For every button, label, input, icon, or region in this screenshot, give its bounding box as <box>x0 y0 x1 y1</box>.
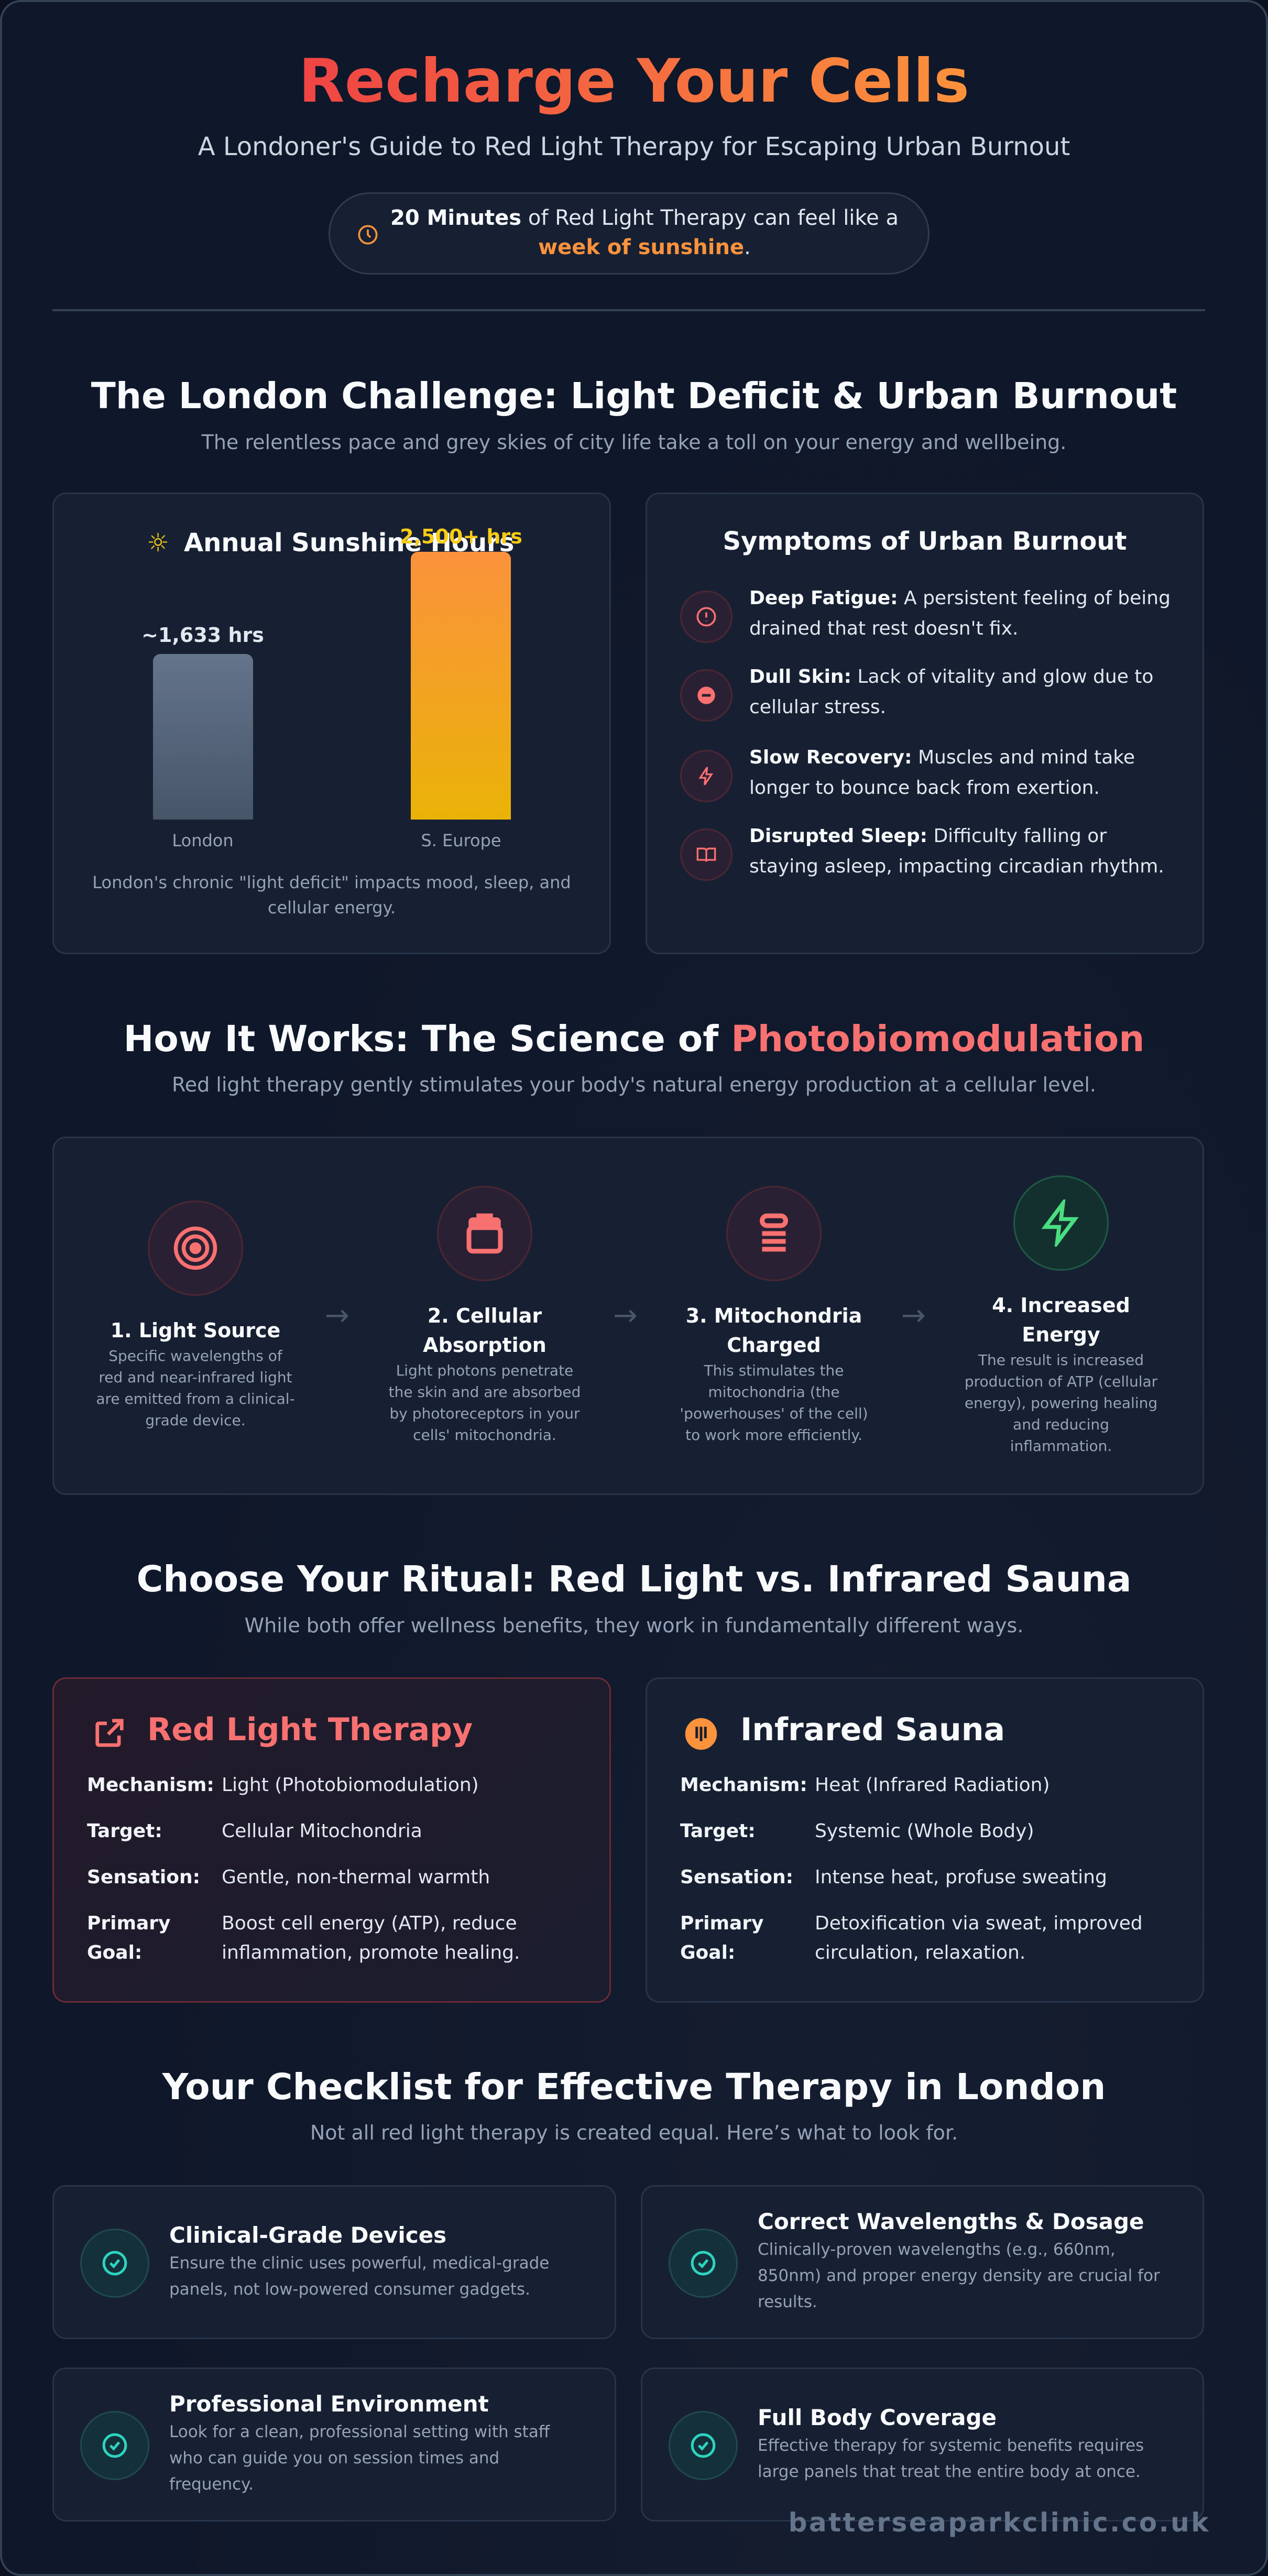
subtitle: A Londoner's Guide to Red Light Therapy for Escaping Urban Burnout <box>198 132 1070 161</box>
step 2: by photoreceptors in your <box>389 1405 580 1422</box>
comparison rows: Goal: <box>680 1942 735 1963</box>
subheading: Red light therapy gently stimulates your body's natural energy production at a cellular level. <box>172 1073 1096 1096</box>
step 4: and reducing <box>1013 1416 1109 1433</box>
step 2: the skin and are absorbed <box>389 1383 581 1401</box>
icon: stack <box>726 1186 822 1281</box>
step 4 <box>965 1175 1158 1455</box>
symptom list: Disrupted Sleep: Difficulty falling or staying asleep, impacting circadian rhythm. <box>749 825 1164 877</box>
comparison rows: Goal: <box>87 1942 142 1963</box>
bar chart <box>141 525 522 850</box>
callout text: week of sunshine. <box>538 235 751 259</box>
step 3 <box>680 1186 868 1444</box>
comparison rows: Cellular Mitochondria <box>222 1820 422 1842</box>
subheading: The relentless pace and grey skies of city life take a toll on your energy and wellbeing. <box>202 431 1066 454</box>
step 3: mitochondria (the <box>708 1383 840 1401</box>
card title: Red Light Therapy <box>147 1711 473 1748</box>
chart heading: ☼ Annual Sunshine Hours <box>147 528 514 558</box>
icon: alert <box>680 591 733 643</box>
step 4: production of ATP (cellular <box>965 1373 1157 1390</box>
comparison rows: Primary <box>87 1913 171 1934</box>
comparison rows: inflammation, promote healing. <box>222 1942 520 1963</box>
step 2: Absorption <box>423 1334 546 1357</box>
bar chart: S. Europe <box>421 831 501 850</box>
arrow: → <box>613 1298 638 1333</box>
comparison rows: Boost cell energy (ATP), reduce <box>222 1913 517 1934</box>
icon: check <box>80 2411 149 2480</box>
bar: S. Europe <box>411 552 511 820</box>
callout pill <box>329 192 930 275</box>
step 3: This stimulates the <box>704 1362 844 1379</box>
step 3: to work more efficiently. <box>685 1426 862 1444</box>
title: Recharge Your Cells <box>299 46 969 116</box>
comparison rows: Mechanism: <box>87 1774 214 1796</box>
checklist card 4 <box>641 2367 1204 2522</box>
panel: infrared sauna card <box>646 1677 1204 2003</box>
bar chart: London <box>172 831 234 850</box>
step 2: Light photons penetrate <box>396 1362 573 1379</box>
icon: check <box>669 2229 738 2298</box>
bar chart: ~1,633 hrs <box>141 624 264 647</box>
step 1: Specific wavelengths of <box>108 1347 282 1365</box>
checklist card 1 <box>52 2185 616 2339</box>
checklist card 2: Clinically-proven wavelengths (e.g., 660nm, 850nm) and proper energy density are crucial for results. <box>758 2240 1160 2311</box>
heading: Choose your ritual: Choose Your Ritual: Red Light vs. Infrared Sauna <box>137 1558 1131 1600</box>
arrow: → <box>901 1298 926 1333</box>
symptom list: Dull Skin: Lack of vitality and glow due to cellular stress. <box>749 666 1153 718</box>
symptom list <box>680 587 1171 881</box>
bar: London <box>153 654 253 820</box>
icon: sauna heat <box>685 1718 717 1750</box>
comparison rows: Light (Photobiomodulation) <box>222 1774 479 1796</box>
comparison rows: Sensation: <box>87 1866 200 1888</box>
panel: symptoms <box>646 493 1204 954</box>
step 1: red and near-infrared light <box>99 1369 292 1386</box>
icon: bolt <box>680 750 733 802</box>
comparison rows <box>87 1774 520 1963</box>
symptom list: Slow Recovery: Muscles and mind take longer to bounce back from exertion. <box>749 747 1135 799</box>
icon: check <box>669 2411 738 2480</box>
symptoms heading: Symptoms of Urban Burnout <box>723 527 1127 556</box>
icon: minus <box>680 669 733 722</box>
checklist card 4: Full Body Coverage <box>758 2405 997 2430</box>
subheading: Not all red light therapy is created equal. Here’s what to look for. <box>310 2121 958 2144</box>
icon: check <box>80 2229 149 2298</box>
panel: red light therapy card <box>52 1677 611 2003</box>
checklist card 1: Clinical-Grade Devices <box>169 2222 446 2248</box>
symptom list: Deep Fatigue: A persistent feeling of being drained that rest doesn't fix. <box>749 587 1171 639</box>
heading: How it works: How It Works: The Science of Photobiomodulation <box>124 1018 1144 1060</box>
arrow: → <box>325 1298 349 1333</box>
checklist card 4: Effective therapy for systemic benefits requires large panels that treat the entire body at once. <box>758 2436 1144 2481</box>
icon: target <box>148 1200 243 1296</box>
icon: lightning <box>1013 1175 1109 1270</box>
panel: process steps <box>52 1137 1204 1495</box>
step 4: The result is increased <box>978 1351 1144 1369</box>
step 4: 4. Increased <box>992 1293 1130 1316</box>
comparison rows: Intense heat, profuse sweating <box>815 1866 1107 1888</box>
step 4: inflammation. <box>1010 1437 1112 1455</box>
panel: sunshine chart <box>52 493 611 954</box>
checklist card 2 <box>641 2185 1204 2339</box>
checklist card 3: Look for a clean, professional setting with staff who can guide you on session times and frequency. <box>169 2422 550 2494</box>
chart caption: London's chronic "light deficit" impacts mood, sleep, and cellular energy. <box>92 872 571 918</box>
subheading: While both offer wellness benefits, they work in fundamentally different ways. <box>245 1614 1023 1637</box>
checklist card 3: Professional Environment <box>169 2391 489 2417</box>
step 3: 'powerhouses' of the cell) <box>680 1405 868 1422</box>
step 1 <box>96 1200 295 1429</box>
heading: checklist: Your Checklist for Effective Therapy in London <box>162 2066 1106 2108</box>
bar chart: 2,500+ hrs <box>400 525 522 548</box>
callout text: 20 Minutes of Red Light Therapy can feel like a <box>390 206 899 230</box>
step 2: 2. Cellular <box>428 1304 542 1327</box>
icon: book <box>680 828 733 881</box>
icon: external link <box>95 1719 124 1747</box>
checklist card 3 <box>52 2367 616 2522</box>
step 1: grade device. <box>145 1412 246 1429</box>
step 4: energy), powering healing <box>965 1394 1157 1412</box>
checklist card 1: Ensure the clinic uses powerful, medical-grade panels, not low-powered consumer gadgets. <box>169 2254 549 2299</box>
step 1: are emitted from a clinical- <box>96 1390 295 1407</box>
comparison rows: Sensation: <box>680 1866 793 1888</box>
step 3: 3. Mitochondria <box>686 1304 862 1327</box>
comparison rows: circulation, relaxation. <box>815 1942 1025 1963</box>
comparison rows: Heat (Infrared Radiation) <box>815 1774 1050 1796</box>
callout text <box>390 206 899 259</box>
comparison rows: Gentle, non-thermal warmth <box>222 1866 490 1888</box>
heading: London Challenge: The London Challenge: Light Deficit & Urban Burnout <box>91 375 1177 417</box>
step 4: Energy <box>1022 1323 1100 1346</box>
step 3: Charged <box>727 1334 821 1357</box>
step 2: cells' mitochondria. <box>413 1426 556 1444</box>
comparison rows: Target: <box>87 1820 162 1842</box>
comparison rows: Systemic (Whole Body) <box>815 1820 1034 1842</box>
comparison rows: Detoxification via sweat, improved <box>815 1913 1143 1934</box>
comparison rows: Target: <box>680 1820 756 1842</box>
icon: jar <box>437 1186 532 1281</box>
comparison rows <box>680 1774 1143 1963</box>
comparison rows: Mechanism: <box>680 1774 807 1796</box>
step 2 <box>389 1186 581 1444</box>
icon: clock <box>358 225 377 244</box>
card title: Infrared Sauna <box>740 1711 1005 1748</box>
comparison rows: Primary <box>680 1913 764 1934</box>
step 1: 1. Light Source <box>111 1319 280 1342</box>
checklist card 2: Correct Wavelengths & Dosage <box>758 2209 1144 2234</box>
footer: website: batterseaparkclinic.co.uk <box>789 2507 1210 2538</box>
